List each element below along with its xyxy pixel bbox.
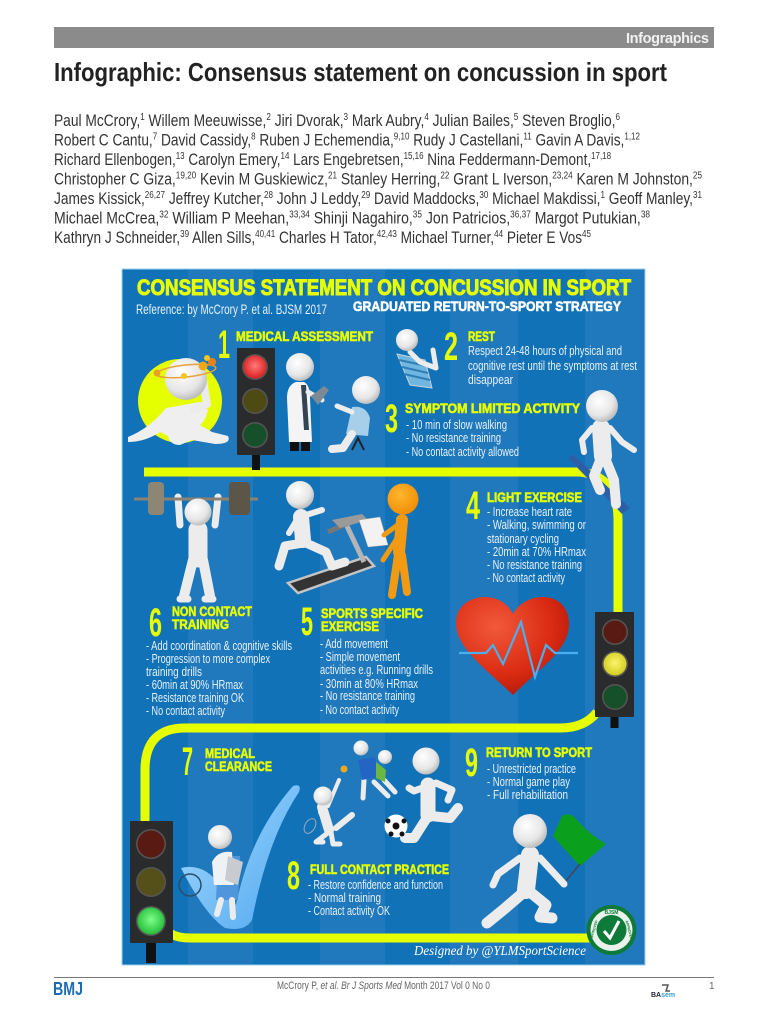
- author list: Lars Engebretsen,: [289, 150, 404, 169]
- author list: Geoff Manley,: [605, 189, 693, 208]
- step 9 heading: RETURN TO SPORT: [486, 745, 593, 760]
- step 6 list: training drills: [146, 665, 202, 679]
- step 2 description: Respect 24-48 hours of physical and: [468, 344, 622, 358]
- author list: 3: [344, 112, 348, 123]
- icon: doctor: [286, 353, 329, 451]
- step number 4: 4: [466, 484, 480, 528]
- author list: 39: [180, 229, 189, 240]
- author list: 21: [328, 170, 337, 182]
- author list: Gavin A Davis,: [532, 130, 624, 150]
- step 5 list: - No contact activity: [320, 703, 400, 717]
- author list: 1: [601, 190, 605, 201]
- author list: Stanley Herring,: [337, 170, 440, 188]
- author list: Kathryn J Schneider,: [54, 228, 211, 247]
- step 8: full contact practice: [287, 740, 458, 918]
- author list: Christopher C Giza,: [54, 170, 203, 188]
- step 1: medical assessment: [128, 323, 380, 470]
- BMJ logo: BMJ: [53, 979, 83, 999]
- step 4 list: - No resistance training: [487, 558, 582, 572]
- step 5 list: - 30min at 80% HRmax: [320, 677, 419, 691]
- icon: heart with ECG trace: [456, 597, 578, 695]
- badge: BJSM approved: APPROVED: [590, 920, 599, 940]
- author list: 26,27: [145, 190, 165, 201]
- step 3 list: - 10 min of slow walking: [406, 418, 507, 432]
- author list: Rudy J Castellani,: [409, 130, 523, 150]
- author list: 1: [140, 112, 145, 123]
- step 6 list: - Resistance training OK: [146, 691, 244, 705]
- author list: Michael McCrea,: [54, 208, 182, 228]
- step 6 list: - Progression to more complex: [146, 652, 271, 666]
- step number 5: 5: [301, 600, 313, 644]
- step number 8: 8: [287, 854, 300, 898]
- icon: figure on deck chair: [396, 329, 436, 388]
- author list: 33,34: [289, 210, 310, 220]
- author list: 19,20: [176, 170, 197, 182]
- author list: David Maddocks,: [370, 189, 479, 208]
- step 9 list: - Full rehabilitation: [487, 788, 568, 802]
- step 8 list: - Restore confidence and function: [308, 878, 443, 892]
- author list: William P Meehan,: [168, 208, 289, 228]
- icon: walking figure on path: [568, 390, 634, 514]
- author list: 23,24: [552, 170, 573, 182]
- section header bar: [54, 27, 714, 48]
- step 2 description: [468, 344, 637, 387]
- author list: Willem Meeuwisse,: [145, 111, 266, 130]
- step 7 heading: MEDICAL: [205, 746, 255, 761]
- step 5 list: activities e.g. Running drills: [320, 663, 433, 677]
- designer credit: Designed by @YLMSportScience: [413, 944, 586, 959]
- icon: sports figures: [302, 740, 458, 844]
- step 5 heading: EXERCISE: [321, 619, 379, 634]
- author list: 28: [264, 190, 273, 201]
- step 6 heading: [172, 604, 253, 632]
- step 4 list: - Walking, swimming or: [487, 518, 586, 532]
- author list: Carolyn Emery,: [185, 150, 281, 169]
- step number 1: 1: [218, 323, 230, 367]
- icon: amber traffic light: [595, 612, 634, 728]
- step number 6: 6: [149, 601, 162, 645]
- step 5 heading: [321, 606, 423, 634]
- step 2 description: cognitive rest until the symptoms at rest: [468, 359, 637, 373]
- step 3 list: - No resistance training: [406, 431, 501, 445]
- step 7: medical clearance: [130, 740, 300, 963]
- yellow progress path: [144, 472, 618, 938]
- step 6 list: - No contact activity: [146, 704, 226, 718]
- author list: 35: [413, 210, 422, 220]
- step 8 list: [308, 878, 443, 918]
- author list: 1,12: [624, 132, 640, 142]
- author list: 17,18: [591, 151, 611, 162]
- step 3 list: [406, 418, 519, 459]
- author list: 31: [693, 190, 702, 201]
- author list: Margot Putukian,: [531, 208, 641, 228]
- section header bar: Infographics: [626, 31, 709, 47]
- step 3 list: - No contact activity allowed: [406, 445, 519, 459]
- subtitle: GRADUATED RETURN-TO-SPORT STRATEGY: [353, 299, 621, 314]
- author list: 13: [176, 151, 185, 162]
- step 5 list: - No resistance training: [320, 689, 415, 703]
- author list: Robert C Cantu,: [54, 130, 177, 150]
- step 7: medical clearance: 7: [182, 740, 193, 784]
- reference line: Reference: by McCrory P. et al. BJSM 2017: [136, 301, 327, 317]
- author list: Karen M Johnston,: [573, 170, 693, 188]
- step 7 heading: CLEARANCE: [205, 759, 272, 774]
- author list: 5: [514, 112, 519, 123]
- author list: 42,43: [377, 229, 397, 240]
- author list: 30: [479, 190, 489, 201]
- author list: 2: [266, 112, 271, 123]
- author list: 8: [251, 132, 256, 142]
- step number 2: 2: [444, 325, 458, 369]
- author list: 6: [615, 112, 620, 123]
- step 2: rest: [396, 325, 637, 388]
- author list: [54, 111, 702, 247]
- citation: McCrory P, et al. Br J Sports Med Month 2017 Vol 0 No 0: [277, 980, 490, 992]
- icon: seated patient: [332, 376, 380, 450]
- step 8 heading: FULL CONTACT PRACTICE: [310, 862, 449, 877]
- author list: 15,16: [404, 151, 424, 162]
- badge: BJSM approved: BJSM: [605, 910, 618, 916]
- step 3 heading: SYMPTOM LIMITED ACTIVITY: [405, 401, 580, 416]
- author list: Julian Bailes,: [429, 111, 514, 130]
- step 3: symptom limited activity: [385, 390, 634, 514]
- author list: Richard Ellenbogen,: [54, 150, 207, 169]
- badge: BJSM approved: APPROVED: [625, 920, 634, 940]
- icon: weightlifter: [134, 482, 258, 599]
- step 8 list: - Normal training: [308, 891, 381, 905]
- author list: Jon Patricios,: [422, 208, 510, 228]
- author list: 7: [153, 132, 158, 142]
- step 6 list: - Add coordination & cognitive skills: [146, 639, 292, 653]
- step 1 heading: MEDICAL ASSESSMENT: [236, 329, 374, 344]
- step 7 heading: [205, 746, 272, 774]
- icon: dizzy figure: [128, 355, 229, 445]
- author list: James Kissick,: [54, 189, 166, 208]
- step 4 list: - 20min at 70% HRmax: [487, 545, 587, 559]
- step 8 list: - Contact activity OK: [308, 904, 390, 918]
- footer rule and publication line: [53, 977, 715, 999]
- author list: 40,41: [255, 229, 276, 240]
- step 2 description: disappear: [468, 373, 513, 387]
- step number 9: 9: [465, 741, 478, 785]
- step number 3: 3: [385, 397, 398, 441]
- author list: 38: [641, 210, 650, 220]
- step 9: return to sport: [465, 741, 606, 923]
- author list: Shinji Nagahiro,: [310, 208, 413, 228]
- step 6 heading: TRAINING: [172, 617, 229, 632]
- step 6: non contact training: [134, 482, 292, 718]
- page number: 1: [709, 981, 715, 992]
- author list: 25: [693, 170, 702, 182]
- step 4: light exercise: [456, 484, 634, 728]
- step 4 list: - No contact activity: [487, 571, 566, 585]
- step 5: sports specific exercise: [279, 481, 433, 717]
- step 9 list: - Normal game play: [487, 775, 571, 789]
- author list: David Cassidy,: [157, 130, 251, 150]
- author list: Mark Aubry,: [348, 111, 424, 130]
- author list: Pieter E Vos: [503, 228, 582, 247]
- author list: Steven Broglio,: [518, 111, 615, 130]
- author list: 22: [440, 170, 450, 182]
- author list: 36,37: [510, 210, 531, 220]
- author list: Paul McCrory,: [54, 111, 160, 130]
- author list: 44: [494, 229, 503, 240]
- step 4 list: stationary cycling: [487, 532, 559, 546]
- author list: 14: [281, 151, 290, 162]
- step 4 list: [487, 505, 587, 585]
- icon: red traffic light: [237, 348, 275, 470]
- step 2 heading: REST: [468, 329, 496, 344]
- badge: BJSM approved: [586, 905, 636, 955]
- author list: Grant L Iverson,: [449, 170, 552, 188]
- author list: John J Leddy,: [273, 189, 361, 208]
- step 6 heading: NON CONTACT: [172, 604, 253, 619]
- author list: Michael Makdissi,: [488, 189, 601, 208]
- author list: Charles H Tator,: [275, 228, 377, 247]
- step 5 heading: SPORTS SPECIFIC: [321, 606, 423, 621]
- step 9 list: [487, 762, 576, 802]
- author list: 45: [582, 229, 591, 240]
- step 5 list: [320, 637, 433, 717]
- title: Infographic: Consensus statement on concussion in sport: [54, 57, 667, 87]
- author list: Ruben J Echemendia,: [256, 130, 394, 150]
- author list: 11: [523, 132, 532, 142]
- icon: green traffic light: [130, 821, 173, 963]
- author list: 32: [159, 210, 169, 220]
- icon: treadmill runner with orange coach: [279, 481, 418, 595]
- author list: Allen Sills,: [189, 228, 255, 247]
- BASEM logo: [651, 985, 675, 999]
- step 4 heading: LIGHT EXERCISE: [487, 490, 582, 505]
- icon: figure with green flag: [487, 814, 606, 923]
- icon: blue check mark with doctor: [179, 785, 300, 929]
- BASEM logo: BAsem: [651, 992, 675, 999]
- step 9 list: - Unrestricted practice: [487, 762, 576, 776]
- step 6 list: - 60min at 90% HRmax: [146, 678, 244, 692]
- author list: 4: [424, 112, 429, 123]
- poster title: CONSENSUS STATEMENT ON CONCUSSION IN SPORT: [137, 275, 631, 300]
- step 5 list: - Add movement: [320, 637, 388, 651]
- author list: Kevin M Guskiewicz,: [196, 170, 328, 188]
- author list: Michael Turner,: [397, 228, 494, 247]
- author list: Jiri Dvorak,: [271, 111, 344, 130]
- step 6 list: [146, 639, 292, 718]
- author list: Jeffrey Kutcher,: [165, 189, 264, 208]
- step 5 list: - Simple movement: [320, 650, 400, 664]
- panel: infographic poster: [122, 269, 645, 965]
- author list: Nina Feddermann-Demont,: [424, 150, 591, 169]
- author list: 29: [361, 190, 371, 201]
- author list: 9,10: [394, 132, 410, 142]
- step 4 list: - Increase heart rate: [487, 505, 572, 519]
